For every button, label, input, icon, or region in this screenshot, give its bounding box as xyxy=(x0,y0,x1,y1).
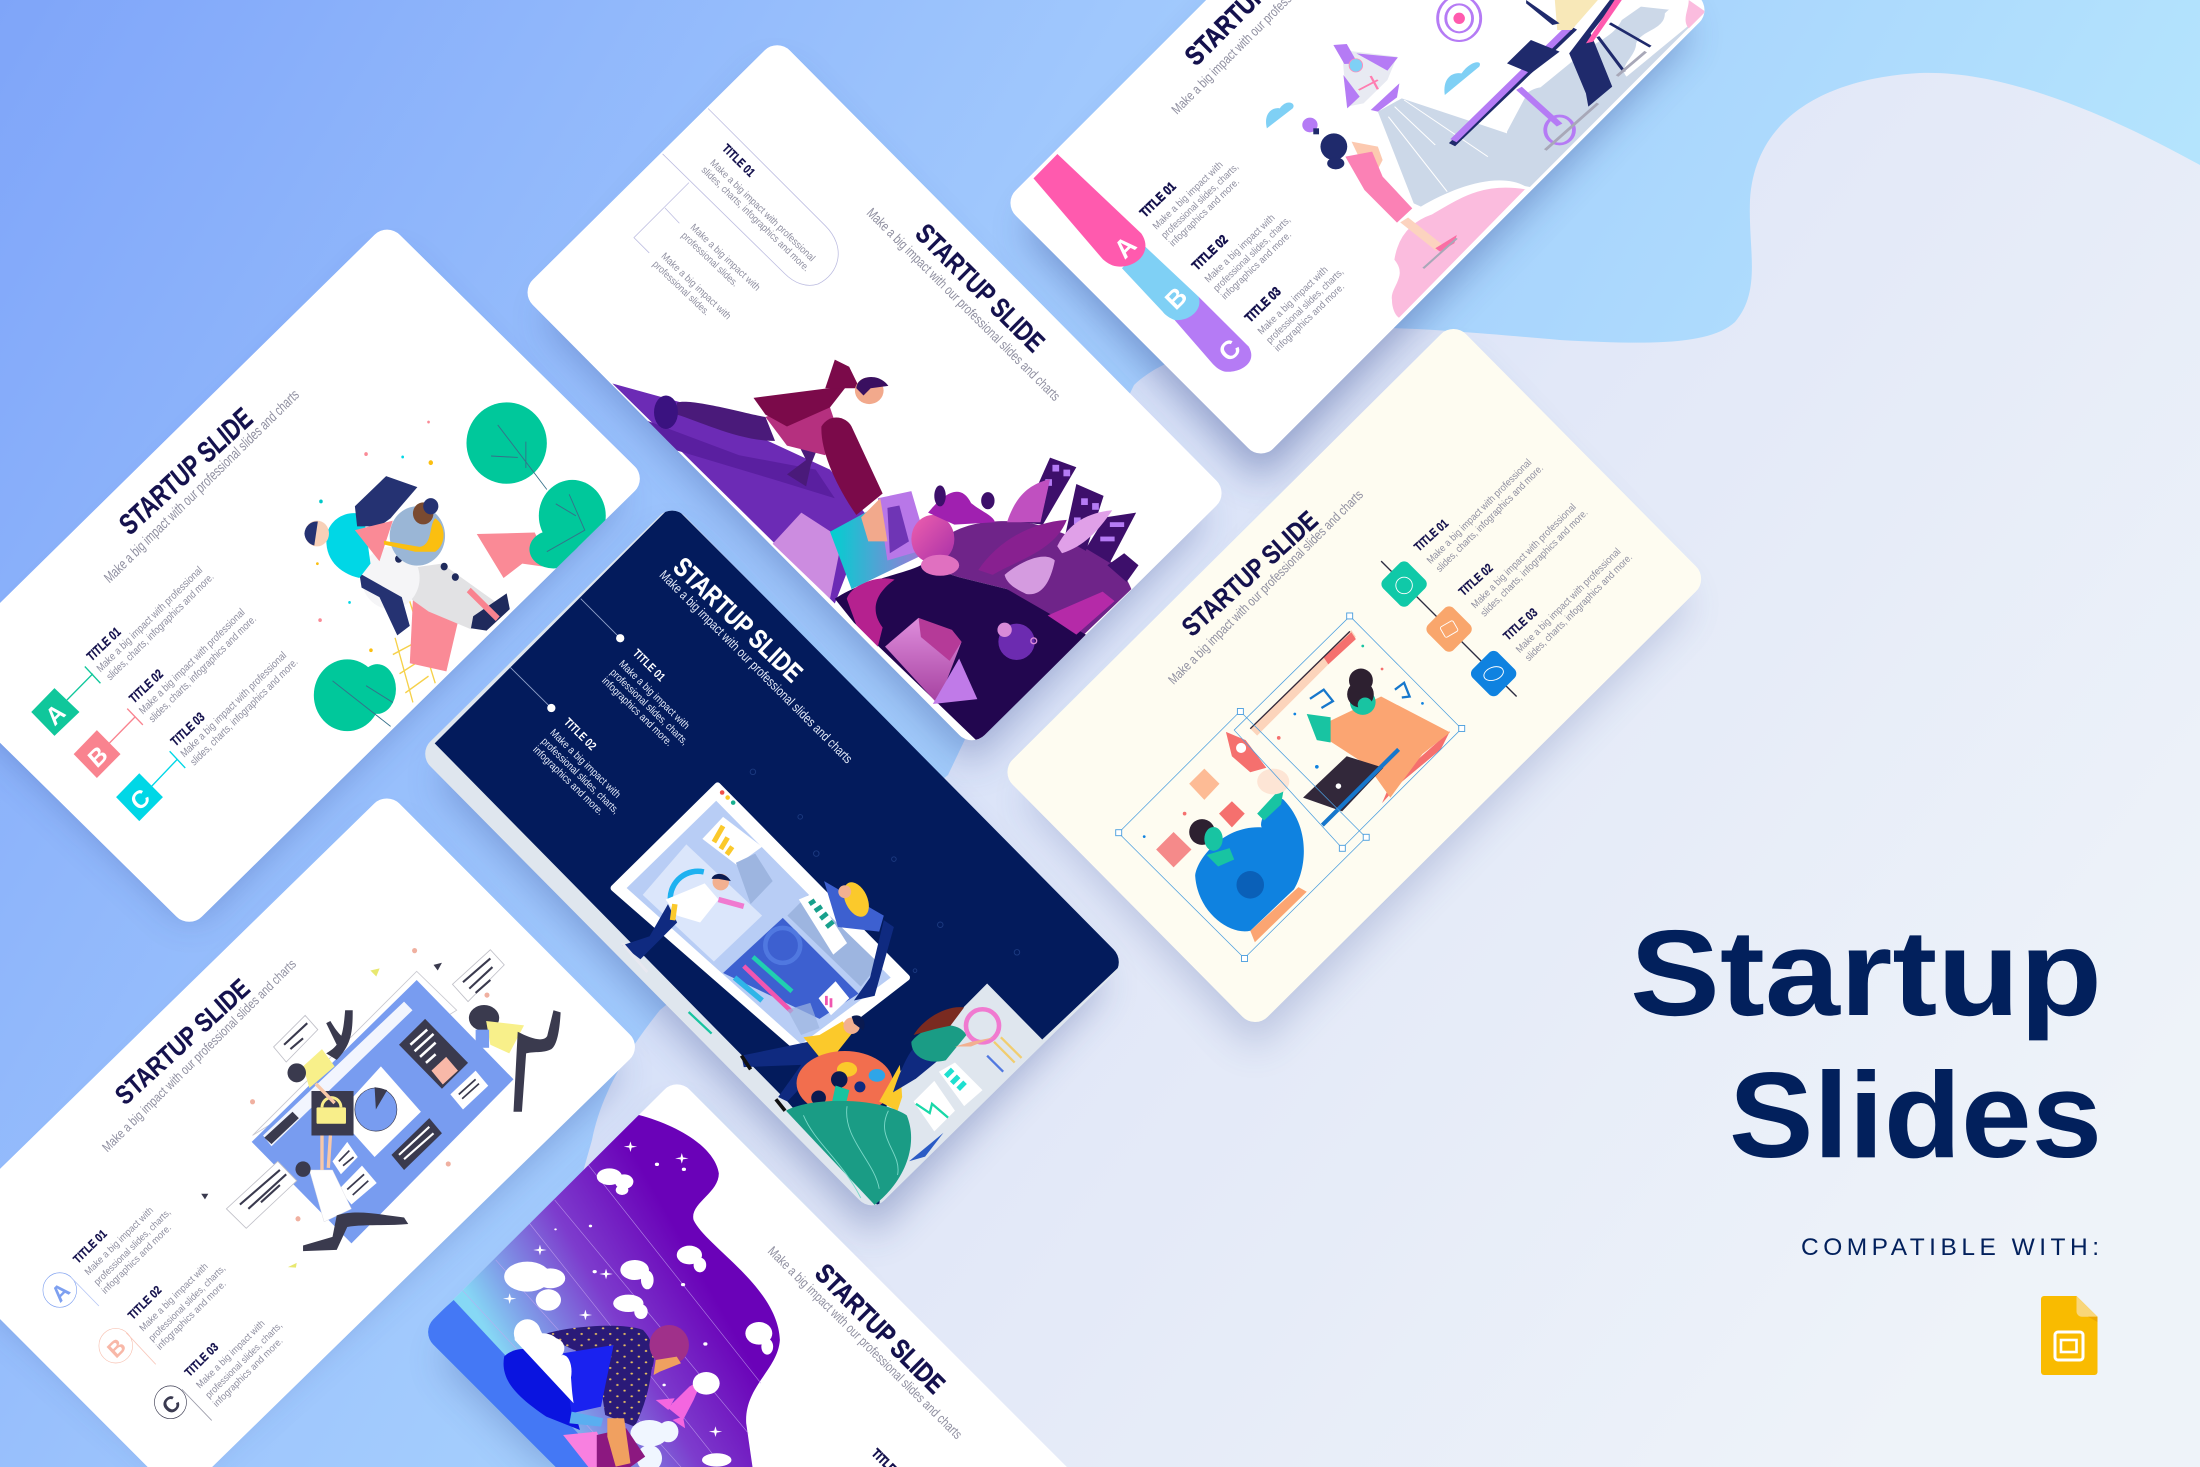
slide background xyxy=(418,503,1126,1213)
item 1: TITLE 01 xyxy=(70,1226,110,1266)
item 3 xyxy=(1242,265,1347,354)
item 1: Make a big impact with professional xyxy=(95,564,205,675)
item 1: TITLE 01 xyxy=(630,646,668,684)
band letter C: C xyxy=(1212,333,1247,367)
badge B: B xyxy=(102,1333,131,1363)
item 3: Make a big impact with xyxy=(194,1318,267,1391)
item 2: TITLE 02 xyxy=(125,1283,165,1322)
item 3: professional slides, charts, xyxy=(204,1320,285,1401)
item 2: infographics and more. xyxy=(1219,230,1294,302)
subheading: Make a big impact with our professional slides and charts xyxy=(99,956,299,1155)
slide background xyxy=(1000,322,1709,1030)
slide background xyxy=(0,791,642,1467)
item 3 xyxy=(182,1318,285,1410)
slide content xyxy=(435,505,1127,1207)
badge C: C xyxy=(126,784,156,816)
badge A xyxy=(31,667,100,736)
item 2: infographics and more. xyxy=(154,1279,229,1353)
item 2: TITLE 02 xyxy=(561,715,600,753)
item 2: professional slides, charts, xyxy=(147,1263,228,1344)
heading: STARTUP SLIDE xyxy=(109,973,255,1111)
badge B xyxy=(74,709,143,778)
heading: STARTUP SLIDE xyxy=(1176,505,1324,642)
item 3: professional slides. xyxy=(650,259,711,318)
item 2: slides, charts, infographics and more. xyxy=(1479,508,1590,619)
badge A: A xyxy=(41,699,71,731)
badge B: B xyxy=(83,741,113,773)
illustration: person launching rocket xyxy=(420,1115,780,1467)
slide content xyxy=(43,948,561,1420)
heading: STARTUP SLIDE xyxy=(667,552,808,688)
item 1: professional slides, charts, xyxy=(92,1207,173,1288)
item 1: Make a big impact with xyxy=(1151,160,1225,232)
item 2: Make a big impact with xyxy=(138,1261,211,1334)
badge C xyxy=(116,751,185,821)
illustration: browser window with people xyxy=(201,948,561,1268)
item 2: Make a big impact with xyxy=(688,222,762,293)
item 1: TITLE 01 xyxy=(719,141,758,180)
item 1: TITLE 01 xyxy=(1411,516,1451,554)
panel: slide top centre, purple climber xyxy=(520,38,1229,748)
item 2: TITLE 02 xyxy=(1456,561,1496,599)
panel: slide top right, rocket and woman xyxy=(1003,0,1712,461)
item 1 xyxy=(581,599,692,749)
icon: Google Slides xyxy=(2041,1296,2098,1375)
slide content xyxy=(31,387,606,821)
title line 1: Startup xyxy=(1630,905,2102,1041)
item 1: Make a big impact with professional xyxy=(1425,457,1534,566)
item 1: TITLE 01 xyxy=(1137,179,1179,220)
band letter B: B xyxy=(1159,281,1193,315)
item 3: TITLE 03 xyxy=(182,1340,221,1379)
subheading: Make a big impact with our professional slides and charts xyxy=(1165,487,1366,687)
item 1: Make a big impact with xyxy=(83,1205,156,1278)
illustration: tablet dashboard with team xyxy=(614,769,1022,1205)
item 3: Make a big impact with professional xyxy=(1514,546,1623,656)
badge A: A xyxy=(46,1278,75,1307)
timeline icons xyxy=(1379,559,1519,699)
badge C xyxy=(154,1386,212,1420)
item 1: infographics and more. xyxy=(100,1223,174,1297)
subheading: Make a big impact with our professional slides and charts xyxy=(102,387,303,587)
item 2: professional slides, charts, xyxy=(539,736,621,817)
item 2: TITLE 02 xyxy=(126,666,166,706)
item 1: Make a big impact with professional xyxy=(707,158,817,264)
heading: STARTUP SLIDE xyxy=(114,402,259,542)
subheading: Make a big impact with our professional slides and charts xyxy=(864,205,1064,404)
item 1: TITLE 01 xyxy=(84,624,123,664)
item 2: TITLE 02 xyxy=(1189,232,1231,273)
item 1: professional slides, charts, xyxy=(608,667,690,748)
panel: slide lower-left, security xyxy=(0,791,642,1467)
badge A xyxy=(43,1273,99,1307)
subheading: Make a big impact with our professional slides and charts xyxy=(657,567,856,766)
badge C: C xyxy=(157,1390,185,1419)
illustration: climber and city xyxy=(612,360,1139,742)
item 2: Make a big impact with xyxy=(547,727,623,801)
item 2 xyxy=(510,668,623,818)
badge B xyxy=(99,1328,156,1364)
item 1: slides, charts, infographics and more. xyxy=(1434,463,1546,575)
illustration: selection frames with two people xyxy=(1116,613,1465,962)
item 2: Make a big impact with professional xyxy=(1470,502,1579,611)
item 3: TITLE 03 xyxy=(1242,284,1284,325)
item 1: slides, charts, infographics and more. xyxy=(104,571,216,683)
item 3: Make a big impact with professional xyxy=(178,649,289,760)
heading: STARTUP SLIDE xyxy=(910,217,1051,358)
item 3: Make a big impact with xyxy=(659,251,733,322)
item 1 xyxy=(70,1205,174,1297)
item 1: professional slides, charts, xyxy=(1159,162,1241,241)
item 3: slides, charts, infographics and more. xyxy=(1523,552,1635,664)
panel: slide right, cream xyxy=(1000,322,1709,1030)
illustration: rocket launch xyxy=(1033,0,1705,372)
illustration: rocket and team xyxy=(304,402,606,731)
pale background blob xyxy=(560,73,2200,1467)
item 1 xyxy=(1137,160,1242,249)
slide background xyxy=(421,1077,1130,1467)
outline decoration xyxy=(634,108,838,285)
item 3: TITLE 03 xyxy=(168,709,207,749)
item 1: Make a big impact with xyxy=(616,658,692,732)
slide content xyxy=(612,108,1139,742)
title line 2: Slides xyxy=(1729,1047,2102,1183)
title: Startup Slides xyxy=(1630,905,2102,1183)
slide background xyxy=(1003,0,1712,461)
panel: slide centre, dark navy xyxy=(418,503,1127,1213)
panel: slide left, rocket team xyxy=(0,222,647,929)
item 1: slides, charts, infographics and more. xyxy=(699,165,811,274)
item 3: slides, charts, infographics and more. xyxy=(188,656,300,768)
item 2: slides, charts, infographics and more. xyxy=(147,613,259,725)
item 2: professional slides. xyxy=(679,230,740,289)
heading: STARTUP SLIDE xyxy=(809,1258,951,1399)
item 3: infographics and more. xyxy=(1272,282,1347,354)
band letter A: A xyxy=(1108,230,1142,264)
item 1: infographics and more. xyxy=(1167,177,1242,249)
slide background xyxy=(520,38,1229,748)
item 1: infographics and more. xyxy=(599,675,675,749)
slide content xyxy=(1116,457,1635,962)
panel: slide bottom, purple sky xyxy=(420,1077,1130,1467)
item 3: infographics and more. xyxy=(211,1336,285,1410)
item 3: TITLE 03 xyxy=(1501,605,1540,643)
item 2 xyxy=(1189,213,1294,302)
item 2: Make a big impact with professional xyxy=(137,606,247,717)
compatibility label: COMPATIBLE WITH: xyxy=(1801,1234,2099,1261)
item 3: Make a big impact with xyxy=(1256,265,1330,337)
slide background xyxy=(0,222,647,929)
item 2: Make a big impact with xyxy=(1203,213,1277,285)
item 2: infographics and more. xyxy=(530,744,606,818)
item 3: professional slides, charts, xyxy=(1264,267,1346,346)
dark backdrop xyxy=(435,505,1127,1207)
item 2 xyxy=(125,1261,229,1353)
item 2: professional slides, charts, xyxy=(1211,215,1293,294)
